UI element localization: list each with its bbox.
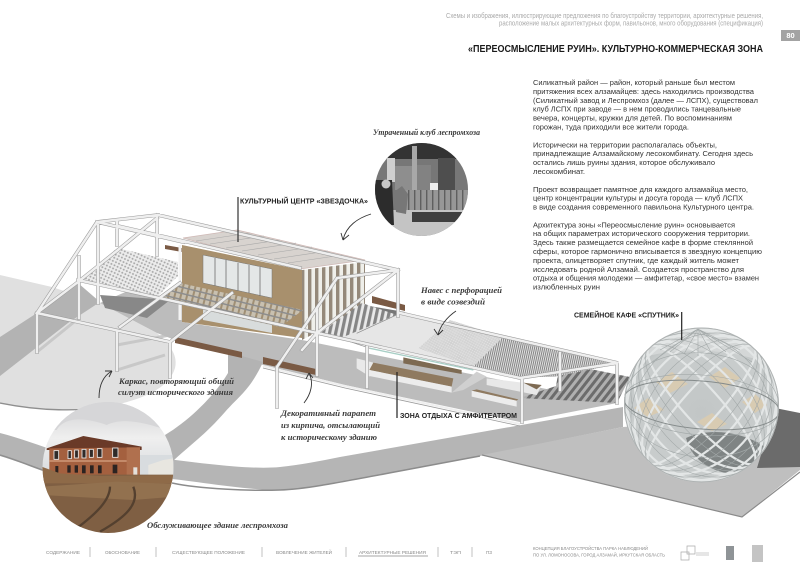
body text: центр концентрации культуры и досуга города — клуб ЛСПХ xyxy=(533,194,743,203)
label: family cafe: СЕМЕЙНОЕ КАФЕ «СПУТНИК» xyxy=(574,310,679,320)
body text: сферы, которое гармонично вписывается в звездную концепцию xyxy=(533,247,762,256)
footer navigation: СОДЕРЖАНИЕ xyxy=(46,550,80,555)
plaza xyxy=(0,275,176,410)
footer navigation xyxy=(46,547,492,557)
label: amphitheatre zone xyxy=(397,372,517,420)
canopy with constellation perforation xyxy=(340,313,618,377)
note: perforated canopy xyxy=(420,285,502,306)
amphitheatre seating xyxy=(357,357,542,407)
body text: клуб ЛСПХ при заводе — в нем проводились танцевальные xyxy=(533,105,741,114)
note: parapet: Декоративный парапет xyxy=(280,408,376,418)
body text: Проект возвращает памятное для каждого алзамайца место, xyxy=(533,185,748,194)
note: perforated canopy: в виде созвездий xyxy=(421,296,485,306)
body text: горожан, туда приходили все жители города. xyxy=(533,122,689,132)
title: «ПЕРЕОСМЫСЛЕНИЕ РУИН». КУЛЬТУРНО-КОММЕРЧЕСКАЯ ЗОНА xyxy=(468,44,763,55)
S-curve walkway xyxy=(165,352,263,462)
pergola slats xyxy=(160,283,403,343)
footer navigation: АРХИТЕКТУРНЫЕ РЕШЕНИЯ xyxy=(359,550,426,555)
footer navigation: ПЗ xyxy=(486,550,492,555)
upper perforated platform xyxy=(82,248,178,297)
body text: проекта, олицетворяет спутник, где каждый житель может xyxy=(533,256,740,265)
note: service building: Обслуживающее здание леспромхоза xyxy=(147,520,289,530)
note: parapet xyxy=(280,408,380,442)
body text: лесокомбинат. xyxy=(533,167,585,176)
note: parapet: к историческому зданию xyxy=(281,432,377,442)
body text: отдыха и общения молодежи — амфитетар, «свое место» взамен xyxy=(533,274,759,283)
note: frame: Каркас, повторяющий общий xyxy=(118,376,234,386)
arrow: parapet xyxy=(304,373,313,403)
photo: lost club of the timber enterprise xyxy=(375,143,470,236)
canopy shadow on slab xyxy=(520,363,630,403)
page number: 80 xyxy=(786,31,795,40)
footer navigation: СУЩЕСТВУЮЩЕЕ ПОЛОЖЕНИЕ xyxy=(172,550,245,555)
body text: на общих параметрах исторического сооружения территории. xyxy=(533,229,750,238)
roof xyxy=(183,230,365,269)
body text: Архитектура зоны «Переосмысление руин» основывается xyxy=(533,220,735,229)
note: parapet: из кирпича, отсылающий xyxy=(281,420,380,430)
footer navigation: ТЭП xyxy=(450,550,461,555)
note: lost club: Утраченный клуб леспромхоза xyxy=(373,127,481,137)
body text: Здесь также размещается семейное кафе в форме стеклянной xyxy=(533,238,753,247)
footer project caption: КОНЦЕПЦИЯ БЛАГОУСТРОЙСТВА ПАРКА НАБЛЮДЕНИЙ xyxy=(533,546,648,551)
header description xyxy=(446,12,763,27)
windows xyxy=(203,255,272,333)
central concrete base xyxy=(100,290,617,426)
sphere slab xyxy=(482,408,800,517)
photo: service building of the timber enterprise xyxy=(42,400,175,535)
body text: принадлежащие Алзамайскому лесокомбинату. Сегодня здесь xyxy=(533,149,753,158)
note: frame: силуэт исторического здания xyxy=(118,387,234,397)
body text: Исторически на территории располагалась объекты, xyxy=(533,140,717,149)
body text xyxy=(533,78,762,292)
label: amphitheatre zone: ЗОНА ОТДЫХА С АМФИТЕАТРОМ xyxy=(400,411,517,420)
page number xyxy=(781,30,800,41)
road lower left xyxy=(0,433,60,476)
body text: вечера, концерты, кружки для детей. По воспоминаниям xyxy=(533,114,732,123)
note: frame xyxy=(118,376,234,397)
body text: притяжения всех алзамайцев: здесь находились производства xyxy=(533,87,755,96)
note: perforated canopy: Навес с перфорацией xyxy=(420,285,502,295)
body text: исследовать родной Алзамай. Создается пространство для xyxy=(533,265,744,274)
body text: остались лишь руины здания, которое обслуживало xyxy=(533,158,715,167)
body text: (Силикатный завод и Леспромхоз (далее — ЛСПХ), существовал xyxy=(533,96,758,105)
footer project caption xyxy=(533,546,665,558)
body text: в виде создания современного павильона Культурного центра. xyxy=(533,203,754,212)
label: cultural center xyxy=(238,196,368,242)
sphere: family cafe Sputnik xyxy=(624,328,779,482)
body text: излюбленных руин xyxy=(533,282,600,292)
arrow: frame xyxy=(99,371,112,398)
label: family cafe xyxy=(574,310,682,340)
arrow: lost club xyxy=(341,214,371,240)
footer project caption: ПО УЛ. ЛОМОНОСОВА, ГОРОД АЛЗАМАЙ, ИРКУТСКАЯ ОБЛАСТЬ xyxy=(533,552,665,558)
body text: Силикатный район — район, который раньше был местом xyxy=(533,78,735,87)
building: cultural center Zvezdochka xyxy=(180,230,365,340)
arrow: canopy xyxy=(434,311,456,335)
header description: расположение малых архитектурных форм, павильонов, много оборудования (спецификация) xyxy=(499,19,763,27)
interior tan patches xyxy=(634,367,767,431)
steel frame xyxy=(37,215,618,422)
brick parapets xyxy=(165,245,405,375)
header description: Схемы и изображения, иллюстрирующие предложения по благоустройству территории, архитектурные решения, xyxy=(446,12,763,20)
footer navigation: ВОВЛЕЧЕНИЕ ЖИТЕЛЕЙ xyxy=(276,548,332,555)
footer navigation: ОБОСНОВАНИЕ xyxy=(105,550,140,555)
label: cultural center: КУЛЬТУРНЫЙ ЦЕНТР «ЗВЕЗДОЧКА» xyxy=(240,196,368,206)
footer logos xyxy=(681,545,763,562)
road to sphere xyxy=(160,407,623,490)
